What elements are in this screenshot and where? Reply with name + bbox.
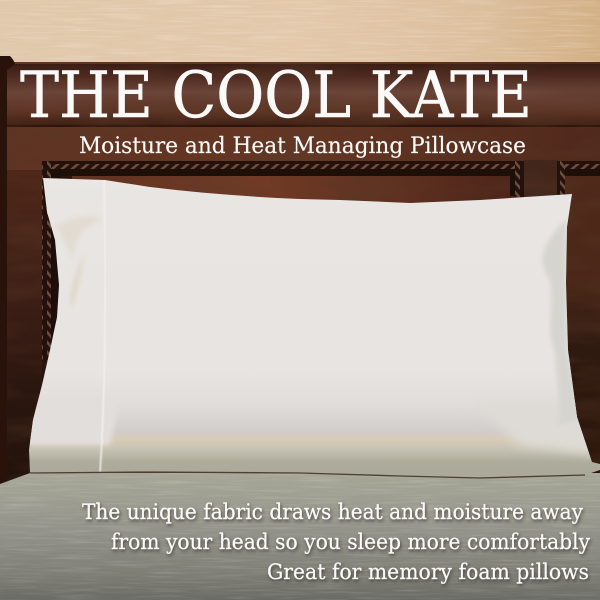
wall	[0, 0, 600, 64]
pillow hem seam	[100, 180, 105, 472]
headboard top rail	[0, 64, 600, 126]
title: THE COOL KATE	[20, 59, 532, 133]
description text: Great for memory foam pillows	[267, 560, 589, 585]
carved rope trim	[42, 161, 600, 361]
bed	[0, 470, 600, 600]
pillow bottom shadow line	[30, 472, 585, 478]
subtitle: Moisture and Heat Managing Pillowcase	[79, 133, 526, 159]
left post	[0, 170, 42, 487]
wood mottling	[0, 62, 600, 487]
inner panel	[42, 176, 524, 206]
right panel	[566, 176, 600, 476]
description text	[82, 500, 591, 585]
lighter lower corners	[20, 400, 120, 445]
right edge folds	[543, 220, 580, 425]
pillow	[0, 178, 600, 480]
headboard	[0, 56, 600, 487]
centre post	[524, 160, 557, 200]
left flap creases	[57, 216, 98, 254]
left edge moulding	[0, 56, 15, 486]
